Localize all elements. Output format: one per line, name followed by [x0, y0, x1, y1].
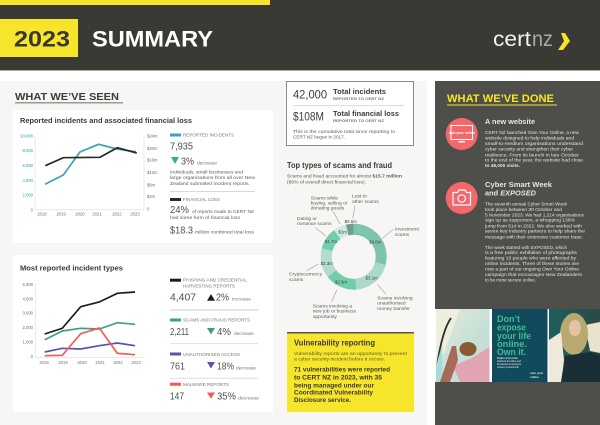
line chart: incidents and loss: 0 — [147, 206, 150, 212]
donut chart: scam types: $2.3m — [321, 261, 333, 266]
panel: reported incidents and financial loss — [13, 110, 273, 243]
poster: don't expose your life online: Own it. — [497, 347, 526, 357]
donut labels: Scams involving — [377, 295, 413, 301]
callout: vulnerability reporting: 71 vulnerabilities were reported — [294, 367, 390, 374]
donut labels: Scams involving a — [313, 303, 352, 309]
legend: scams and fraud — [170, 318, 255, 338]
text: cyber smart week: to be more secure online. — [485, 278, 536, 284]
donut labels: donating goods — [311, 206, 345, 212]
text: cyber smart week: and EXPOSED — [485, 188, 536, 198]
text: a new website: website designed to help individuals and — [485, 136, 574, 142]
line chart: incidents and loss: 2021 — [92, 212, 102, 216]
legend: malware: decrease — [238, 395, 260, 400]
icon: website screen: own your online — [449, 131, 475, 135]
donut chart: scam types — [307, 206, 393, 302]
donut labels — [289, 194, 420, 320]
line chart: incidents and loss: $16m — [147, 158, 158, 162]
donut labels: new job or business — [313, 309, 356, 315]
text: a new website — [485, 117, 583, 169]
legend: financial loss: had some form of financial loss — [170, 215, 241, 221]
poster: don't expose your life online: online. — [497, 339, 527, 349]
legend: phishing: increase — [232, 297, 252, 302]
legend: unauthorised access: decrease — [236, 365, 257, 370]
line chart: incident types: 3,000 — [23, 311, 34, 316]
text: cyber smart week: is a free public exhibition of photographs — [485, 250, 578, 256]
line chart: incident types: 2,000 — [23, 325, 34, 330]
stats box: cumulative totals: Total incidents — [333, 87, 386, 96]
line chart: incident types: 2021 — [95, 360, 105, 365]
legend: financial loss: 24% — [170, 205, 189, 216]
text: a new website: CERT NZ launched Own Your Online, a new — [485, 130, 579, 136]
legend: reported incidents — [170, 133, 255, 187]
line chart: incident types: 2018 — [39, 360, 49, 365]
text: cyber smart week: The seventh annual Cyber Smart Week — [485, 202, 568, 208]
line chart: incidents and loss: 2023 — [130, 212, 140, 216]
text: a new website: cyber security and strengthen their cyber — [485, 147, 573, 153]
heading: top types of scams: Scams and fraud accounted for almost $15.7 million — [287, 174, 402, 180]
legend: malware: 147 — [170, 391, 184, 402]
stats box: cumulative totals: This is the cumulative total since reporting to — [293, 129, 395, 135]
logo: cert nz: cert — [493, 28, 531, 51]
callout: vulnerability reporting — [287, 332, 414, 412]
panel title: Most reported incident types — [20, 264, 123, 273]
donut labels: scams — [289, 278, 304, 283]
text: cyber smart week: now a part of our ongoing Own Your Online — [485, 266, 579, 272]
line chart: incidents and loss: 8,000 — [23, 148, 34, 153]
text: cyber smart week: message with their extensive customer base. — [485, 234, 583, 240]
line chart: incidents and loss: 2022 — [112, 212, 122, 216]
text: cyber smart week: Cyber Smart Week — [485, 180, 553, 189]
legend: financial loss: $18.3 — [170, 226, 193, 237]
donut chart: scam types: $4.6m — [369, 240, 382, 244]
line chart: incident types: 2023 — [131, 360, 141, 365]
poster: don't expose your life online: lost access to accounts — [497, 362, 522, 366]
poster: don't expose your life online — [492, 309, 548, 382]
legend: financial loss — [170, 197, 255, 237]
callout: vulnerability reporting: Vulnerability reports are an opportunity to prevent — [294, 351, 408, 357]
line chart: incidents and loss: 0 — [31, 208, 34, 212]
poster: don't expose your life online: protect yourself with — [497, 365, 520, 369]
left content background — [0, 81, 427, 425]
heading: top types of scams: Top types of scams and fraud — [287, 160, 392, 170]
heading: top types of scams: (86% of overall direct financial loss). — [287, 179, 366, 185]
stats box: cumulative totals: 42,000 — [293, 88, 327, 102]
year badge — [0, 19, 78, 57]
text: a new website: resilience. From its launch in late October — [485, 152, 579, 158]
line chart: incident types: 5,000 — [23, 282, 34, 287]
line chart: incident types: 2019 — [58, 360, 68, 365]
logo: cert nz — [493, 28, 570, 51]
legend: reported incidents: large organisations from all over New — [170, 175, 255, 181]
callout: vulnerability reporting: being managed under our — [294, 382, 374, 389]
legend: phishing: 4,407 — [170, 293, 196, 304]
legend: reported incidents: 7,935 — [170, 141, 193, 152]
legend: reported incidents: Individuals, small businesses and — [170, 170, 243, 176]
legend: financial loss: million combined total loss — [195, 230, 255, 236]
text: cyber smart week: featuring 10 people who were affected by — [485, 256, 577, 262]
donut labels: Cryptocurrency — [289, 272, 323, 278]
poster: don't expose your life online: online — [530, 375, 539, 379]
legend: scams and fraud: 4% — [217, 327, 231, 338]
stats box: cumulative totals — [286, 82, 414, 146]
poster: don't expose your life online: your life — [497, 331, 531, 341]
text: cyber smart week: jump from 514 in 2022. We also worked with — [484, 223, 582, 229]
donut labels: money transfer — [377, 306, 410, 312]
panel title: Reported incidents and associated financial loss — [20, 116, 192, 125]
text: cyber smart week: The week started with EXPOSED, which — [485, 245, 567, 251]
line chart: incidents and loss: $8m — [147, 182, 156, 188]
section heading: WHAT WE’VE DONE — [447, 93, 554, 105]
logo: cert nz: nz — [532, 28, 553, 51]
legend: reported incidents: REPORTED INCIDENTS — [183, 133, 234, 138]
legend: scams and fraud: SCAMS AND FRAUD REPORTS — [183, 318, 250, 323]
donut chart: scam types: $3.1m — [366, 276, 378, 280]
text: cyber smart week: online incidents. Three of these stories are — [485, 261, 579, 267]
line chart: incident types: 0 — [31, 354, 34, 359]
line chart: incidents and loss: 2020 — [75, 212, 85, 216]
icon: website screen — [446, 118, 478, 150]
donut chart: scam types: $2.5m — [335, 280, 347, 284]
donut labels: buying, selling or — [311, 200, 348, 206]
text: cyber smart week: campaign that encourages New Zealanders — [485, 272, 583, 278]
poster: don't expose your life online: Don’t — [497, 314, 520, 324]
text: cyber smart week: 5 November 2023. We had 1,214 organisations — [485, 212, 585, 218]
donut labels: unauthorised — [377, 301, 406, 307]
stats box: cumulative totals: $108M — [293, 110, 324, 124]
panel: most reported incident types — [13, 255, 273, 412]
donut labels: Lost to — [352, 194, 367, 200]
legend: reported incidents: Zealand submitted incident reports. — [170, 181, 250, 187]
title: SUMMARY — [92, 26, 213, 52]
header band — [0, 0, 600, 71]
section heading: what we've seen: WHAT WE’VE SEEN — [15, 92, 119, 103]
donut chart: scam types: $1m — [338, 230, 347, 235]
line chart: incidents and loss: 6,000 — [23, 163, 34, 168]
donut labels: other scams — [352, 199, 379, 205]
poster: don't expose your life online: Madison and Lachlan — [497, 356, 519, 360]
donut labels: opportunity — [313, 314, 337, 320]
line chart: incidents and loss: 4,000 — [23, 178, 34, 183]
legend: unauthorised access: 18% — [217, 361, 234, 372]
line chart: incidents and loss — [20, 134, 158, 216]
text: cyber smart week: took place between 30 October and — [485, 207, 562, 213]
legend: unauthorised access — [170, 352, 257, 372]
poster: don't expose your life online: expose — [497, 322, 526, 332]
legend: phishing — [170, 278, 252, 304]
photo: blonde woman — [549, 309, 600, 382]
stats box: cumulative totals: REPORTED TO CERT NZ — [333, 119, 385, 123]
line chart: incident types: 1,000 — [23, 340, 34, 344]
legend: reported incidents: 3% — [181, 156, 194, 167]
legend: unauthorised access: UNAUTHORISED ACCESS — [183, 352, 240, 357]
line chart: incidents and loss: $24m — [147, 134, 158, 138]
panel: what we've done — [435, 81, 600, 425]
donut labels: Scams while — [311, 195, 338, 201]
text: a new website: to the end of the year, the website had close — [485, 158, 583, 164]
icon: camera — [446, 182, 478, 214]
heading: top types of scams — [287, 160, 402, 185]
text: cyber smart week: sign up as supporters, a whopping 136% — [485, 218, 576, 224]
line chart: incident types: 4,000 — [23, 296, 34, 302]
legend: phishing: PHISHING AND CREDENTIAL — [183, 278, 248, 282]
line chart: incidents and loss: 10,000 — [20, 134, 34, 138]
legend: financial loss: of reports made to CERT NZ — [192, 209, 254, 215]
legend: malware: 35% — [217, 391, 236, 402]
line chart: incidents and loss: 2,000 — [23, 192, 34, 198]
donut labels: Dating or — [297, 216, 317, 222]
line chart: incidents and loss: $4m — [147, 194, 156, 199]
donut labels: scams — [395, 233, 410, 238]
callout: vulnerability reporting: to CERT NZ in 2023, with 35 — [294, 374, 382, 381]
text: cyber smart week: seven key industry partners to help share the — [485, 229, 585, 235]
text: a new website: to 48,000 visits. — [485, 163, 521, 169]
legend: phishing: 2% — [216, 293, 229, 304]
line chart: incidents and loss: 2019 — [56, 212, 66, 216]
donut labels: Investment — [395, 227, 420, 233]
legend: unauthorised access: 761 — [170, 361, 185, 372]
line chart: incidents and loss: $12m — [147, 170, 158, 175]
legend: malware — [170, 382, 260, 402]
line chart: incidents and loss: $20m — [147, 146, 158, 151]
legend: phishing: HARVESTING REPORTS — [183, 284, 235, 288]
callout: vulnerability reporting: Vulnerability reporting — [294, 338, 375, 348]
callout: vulnerability reporting: Disclosure service. — [294, 397, 351, 404]
callout: vulnerability reporting: a cyber security incident before it occurs. — [294, 357, 385, 363]
donut chart: scam types: $1.7m — [325, 239, 337, 244]
photo strip — [435, 309, 600, 382]
top accent bar — [0, 0, 270, 5]
line chart: incident types — [23, 282, 144, 365]
legend: malware: MALWARE REPORTS — [183, 382, 229, 387]
text: a new website: small-to-medium organisations understand — [485, 141, 583, 147]
donut labels: romance scams — [297, 221, 332, 227]
poster: don't expose your life online: shared a lot online and — [497, 359, 522, 363]
poster: don't expose your life online: own your — [530, 371, 544, 375]
text: cyber smart week — [484, 180, 585, 284]
photo: person with hairbrush — [436, 309, 490, 382]
stats box: cumulative totals: REPORTED TO CERT NZ — [333, 97, 385, 101]
legend: financial loss: FINANCIAL LOSS — [183, 197, 220, 202]
line chart: incidents and loss: 2018 — [37, 212, 47, 216]
stats box: cumulative totals: CERT NZ began in 2017. — [293, 134, 345, 140]
legend: scams and fraud: decrease — [234, 331, 255, 336]
text: a new website: A new website — [485, 117, 535, 126]
line chart: incident types: 2020 — [77, 360, 87, 365]
legend: reported incidents: decrease — [197, 160, 218, 165]
line chart: incident types: 2022 — [113, 360, 123, 365]
donut chart: scam types: $0.6m — [345, 219, 357, 224]
year badge: 2023 — [14, 26, 70, 52]
legend: scams and fraud: 2,211 — [170, 327, 189, 338]
callout: vulnerability reporting: Coordinated Vulnerability — [294, 390, 373, 397]
stats box: cumulative totals: Total financial loss — [333, 109, 399, 118]
